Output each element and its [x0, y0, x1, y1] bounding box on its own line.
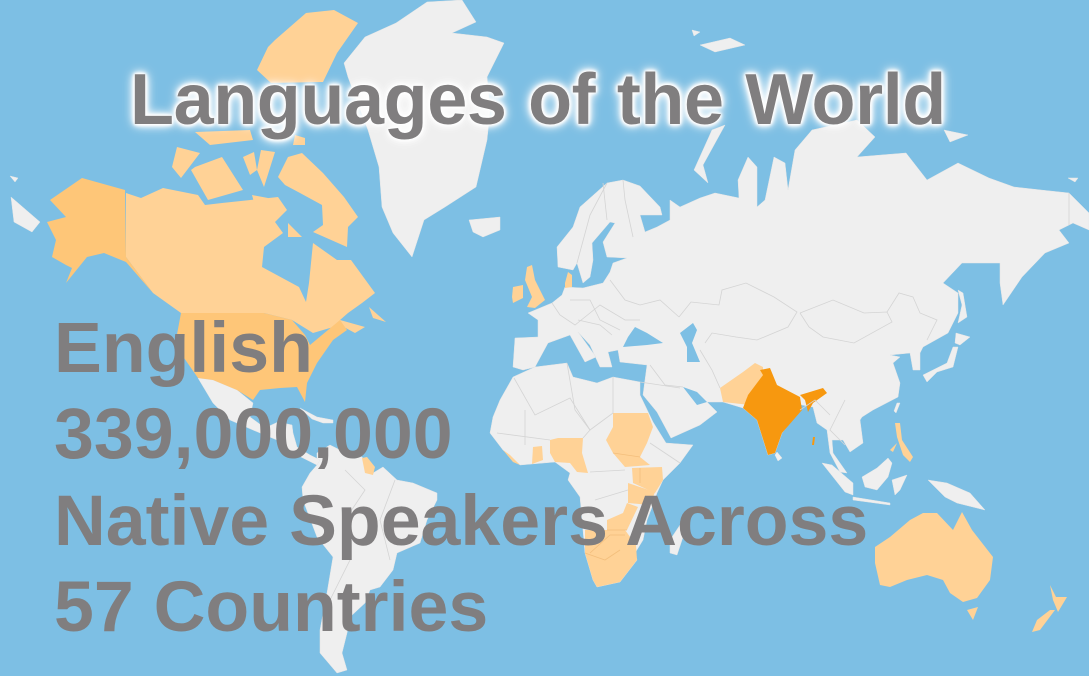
- callout: English speaker statistics: 57 Countries: [54, 567, 488, 647]
- callout: English speaker statistics: English: [54, 308, 313, 388]
- callout: English speaker statistics: [54, 308, 868, 647]
- country borders: [330, 180, 1069, 600]
- highlighted country: India: [743, 368, 827, 455]
- highlighted countries: Alaska and contiguous USA: [47, 178, 347, 402]
- callout: English speaker statistics: Native Speakers Across: [54, 481, 868, 561]
- title: Languages of the World: [130, 60, 946, 140]
- highlighted countries: English speakers: [126, 10, 1067, 632]
- highlighted country borders: [585, 453, 640, 560]
- inland and marginal seas: [623, 323, 707, 405]
- callout: English speaker statistics: 339,000,000: [54, 394, 453, 474]
